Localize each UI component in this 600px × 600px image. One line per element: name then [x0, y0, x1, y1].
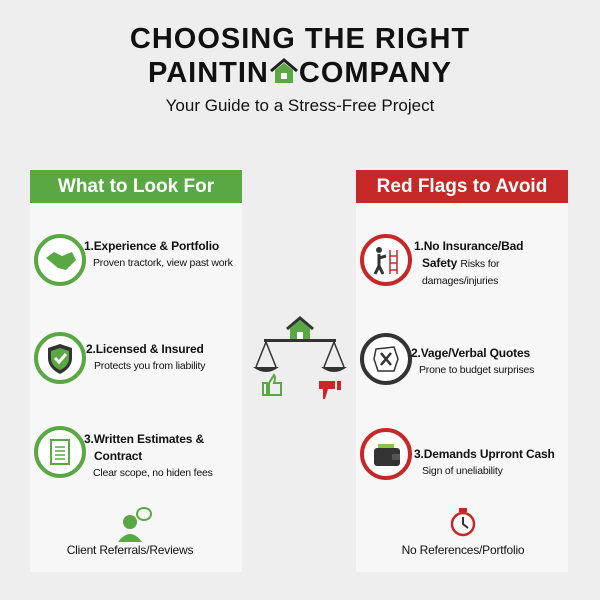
heading: red flags	[356, 170, 568, 203]
scale illustration	[253, 316, 347, 399]
panel: red flags	[356, 170, 568, 572]
heading: what to look for	[30, 170, 242, 203]
item 2: 2.Vage/Verbal Quotes	[411, 346, 530, 360]
item 3	[84, 432, 213, 479]
icon: person reviews	[118, 507, 152, 542]
caption: client referrals: Client Referrals/Reviews	[67, 543, 193, 557]
panel: what to look for	[30, 170, 242, 572]
title: CHOOSING THE RIGHT	[130, 23, 470, 55]
item 3: Contract	[94, 449, 142, 463]
item 3: 3.Written Estimates &	[84, 432, 204, 446]
item 2: Prone to budget surprises	[419, 364, 534, 376]
caption: no references: No References/Portfolio	[402, 543, 524, 557]
item 2: 2.Licensed & Insured	[86, 342, 204, 356]
item 2	[411, 346, 534, 376]
icon: shield	[34, 332, 86, 384]
item 3: Clear scope, no hiden fees	[93, 467, 213, 479]
icon: handshake	[34, 234, 86, 286]
item 3	[414, 447, 555, 477]
item 1: Proven tractork, view past work	[93, 257, 233, 269]
item 1: 1.Experience & Portfolio	[84, 239, 219, 253]
icon: stopwatch	[450, 508, 476, 536]
item 2	[86, 342, 206, 372]
icon: wallet	[360, 428, 412, 480]
item 1: Safety Risks for	[422, 256, 499, 270]
title: PAINTIN COMPANY	[148, 57, 452, 89]
item 3: 3.Demands Uprront Cash	[414, 447, 555, 461]
icon: rejected quote	[360, 333, 412, 385]
item 1: 1.No Insurance/Bad	[414, 239, 523, 253]
item 1	[84, 239, 233, 269]
icon: document	[34, 426, 86, 478]
item 2: Protects you from liability	[94, 360, 205, 372]
heading: red flags: Red Flags to Avoid	[377, 176, 547, 197]
title	[130, 23, 470, 89]
subtitle: Your Guide to a Stress-Free Project	[166, 96, 434, 115]
item 1	[414, 239, 523, 287]
icon: ladder fall	[360, 234, 412, 286]
item 3: Sign of uneliability	[422, 465, 503, 477]
heading: what to look for: What to Look For	[58, 176, 214, 197]
item 1: damages/injuries	[422, 275, 498, 287]
